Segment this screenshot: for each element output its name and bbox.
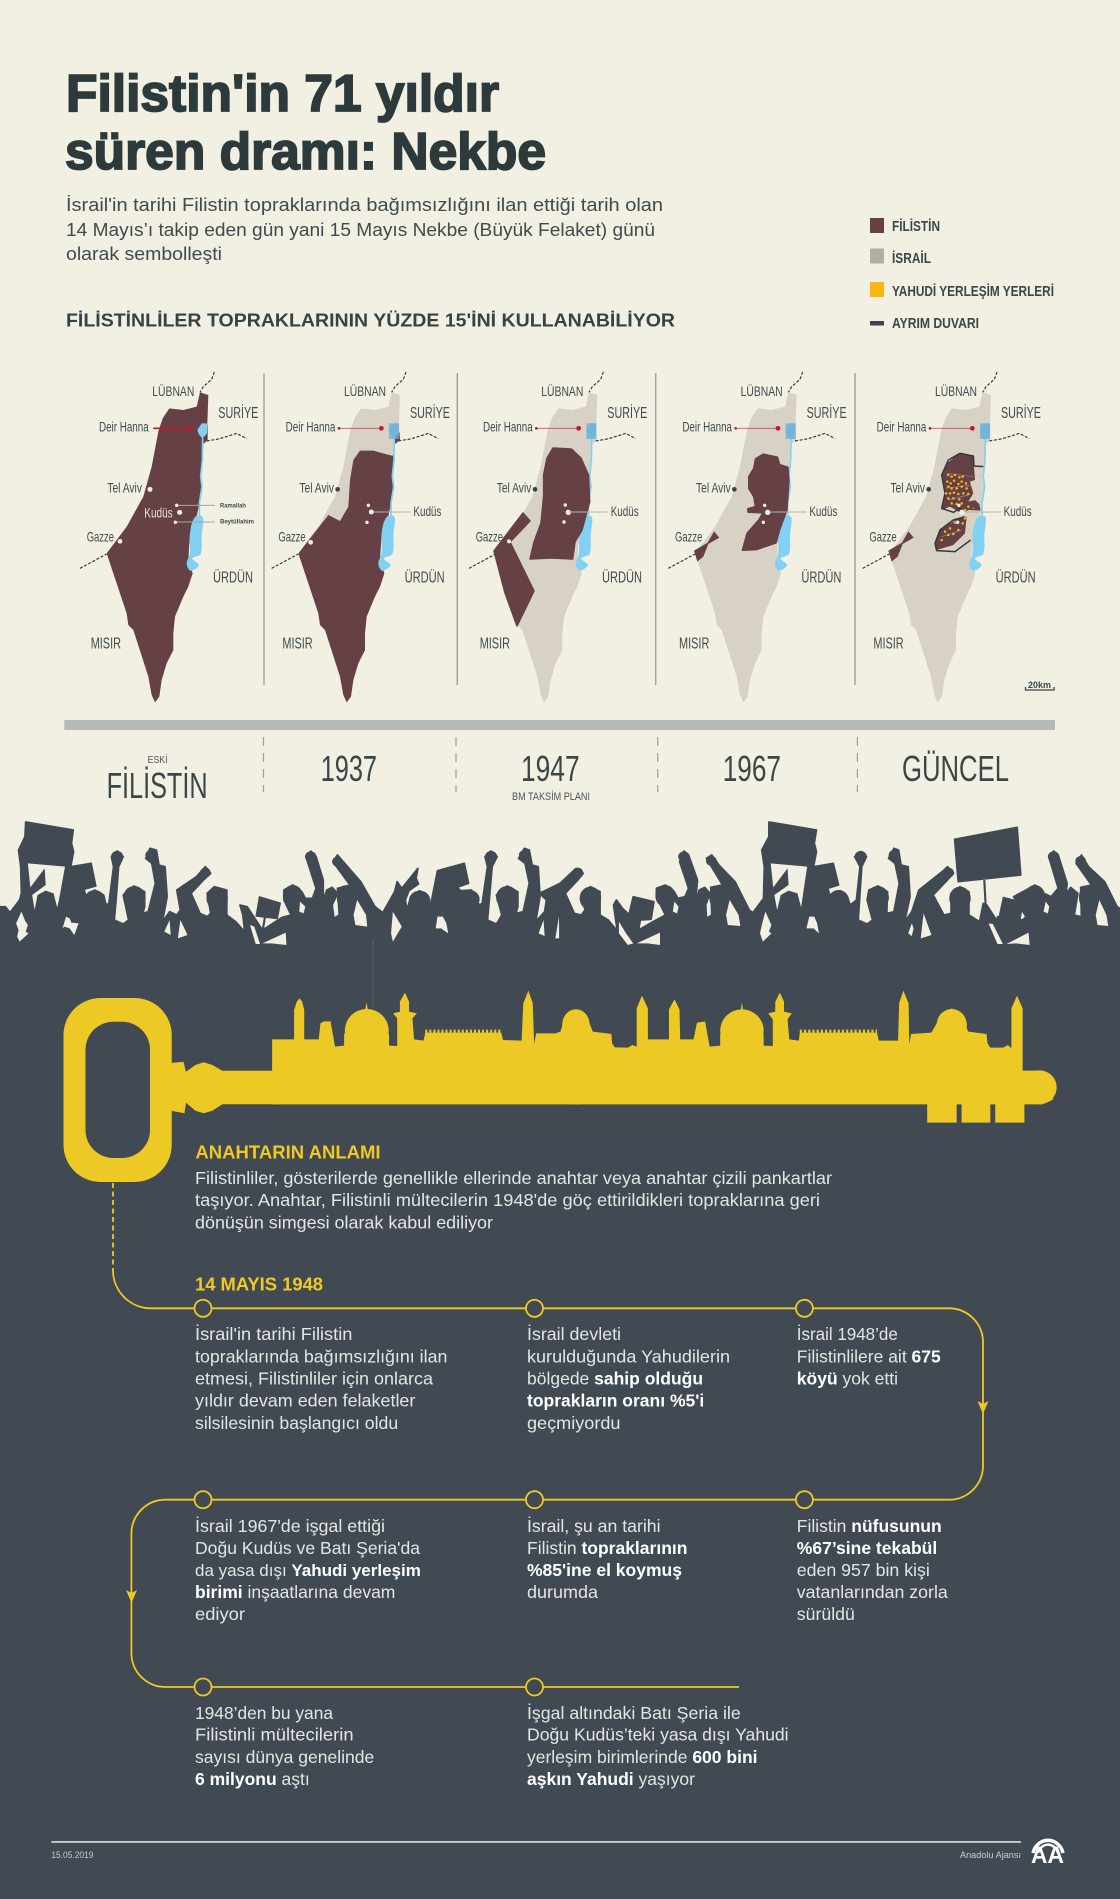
map: 1947 bbox=[469, 372, 647, 702]
map: Eski Filistin: SURİYE bbox=[218, 403, 258, 422]
period label: 1967: 1967 bbox=[723, 748, 781, 789]
map: 1967: MISIR bbox=[679, 635, 709, 652]
map: 1967: Gazze bbox=[675, 529, 702, 545]
footer rule bbox=[51, 1841, 1021, 1843]
event text: 85% of land: Filistin topraklarının bbox=[527, 1538, 687, 1558]
event text: 67% population: sürüldü bbox=[797, 1604, 855, 1624]
map: 1937: Tel Aviv bbox=[299, 479, 334, 495]
legend: Yahudi yerleşim yerleri bbox=[870, 282, 1054, 300]
legend bbox=[870, 218, 1054, 332]
map: 1967: LÜBNAN bbox=[741, 384, 783, 399]
period label: Eski Filistin bbox=[107, 753, 208, 806]
event text: 67% population: Filistin nüfusunun bbox=[797, 1516, 942, 1536]
intro paragraph: İsrail'in tarihi Filistin topraklarında bağımsızlığını ilan ettiği tarih olan bbox=[66, 195, 663, 215]
legend: Filistin: FİLİSTİN bbox=[892, 218, 940, 235]
intro paragraph: olarak sembolleşti bbox=[66, 244, 222, 264]
map: 1967: SURİYE bbox=[807, 403, 847, 422]
map: 1967: ÜRDÜN bbox=[801, 569, 841, 587]
event text: 600 thousand settlers: Doğu Kudüs’teki yasa dışı Yahudi bbox=[527, 1725, 789, 1745]
legend: İsrail: İSRAİL bbox=[892, 250, 931, 267]
event text: 600 thousand settlers: yerleşim birimlerinde 600 bini bbox=[527, 1747, 758, 1767]
map: Eski Filistin: Gazze bbox=[87, 529, 114, 545]
title: süren dramı: Nekbe bbox=[65, 123, 546, 181]
map dividers bbox=[264, 373, 855, 685]
map: 1947: MISIR bbox=[480, 635, 510, 652]
event text: settlements: da yasa dışı Yahudi yerleşim bbox=[195, 1561, 421, 1580]
map: Eski Filistin bbox=[80, 372, 258, 702]
map: 1947: ÜRDÜN bbox=[602, 569, 642, 587]
event text: Israel independence: silsilesinin başlangıcı oldu bbox=[195, 1413, 398, 1433]
map: 1967: Kudüs bbox=[809, 503, 837, 519]
crowd silhouette bbox=[0, 822, 1120, 1000]
event text: 675 villages: Filistinlilere ait 675 bbox=[797, 1346, 941, 1366]
event text: Israel independence: İsrail'in tarihi Filistin bbox=[195, 1324, 352, 1344]
event text: 675 villages bbox=[797, 1324, 941, 1388]
legend: Yahudi yerleşim yerleri: YAHUDİ YERLEŞİM YERLERİ bbox=[892, 283, 1054, 300]
legend: Filistin bbox=[870, 218, 940, 235]
timeline bar bbox=[64, 720, 1055, 730]
period label: 1947: BM TAKSİM PLANI bbox=[512, 790, 590, 803]
event text: land share 5% bbox=[527, 1324, 730, 1433]
map: 1947: Tel Aviv bbox=[497, 479, 531, 495]
map: Güncel: Gazze bbox=[869, 529, 897, 545]
map: 1967: Deir Hanna bbox=[682, 419, 732, 435]
event text: 67% population bbox=[797, 1516, 948, 1624]
map: 1937: Kudüs bbox=[413, 503, 441, 519]
legend: ayrım duvarı bbox=[870, 316, 979, 332]
event text: 675 villages: köyü yok etti bbox=[797, 1368, 898, 1388]
event text: 600 thousand settlers bbox=[527, 1703, 789, 1789]
map: 1967: Tel Aviv bbox=[696, 479, 731, 495]
event text: 85% of land: durumda bbox=[527, 1582, 598, 1602]
dark lower panel bbox=[0, 940, 1120, 1899]
period label: Eski Filistin: ESKİ bbox=[148, 753, 168, 766]
intro paragraph bbox=[66, 195, 663, 264]
map: Eski Filistin: LÜBNAN bbox=[152, 384, 194, 399]
event text: settlements: birimi inşaatlarına devam bbox=[195, 1582, 395, 1602]
section heading: FİLİSTİNLİLER TOPRAKLARININ YÜZDE 15'İNİ KULLANABİLİYOR bbox=[66, 310, 675, 330]
key meaning paragraph: taşıyor. Anahtar, Filistinli mültecilerin 1948'de göç ettirildikleri topraklarına geri bbox=[195, 1190, 820, 1210]
arrow: right side bbox=[978, 1401, 988, 1414]
key meaning paragraph bbox=[195, 1168, 832, 1232]
event text: 85% of land: İsrail, şu an tarihi bbox=[527, 1516, 660, 1536]
map: 1947: SURİYE bbox=[607, 403, 647, 422]
map: Eski Filistin: Tel Aviv bbox=[107, 479, 142, 495]
timeline nodes bbox=[194, 1300, 813, 1696]
heading: Anahtarın anlamı: ANAHTARIN ANLAMI bbox=[195, 1142, 381, 1162]
event text: Israel independence: topraklarında bağımsızlığını ilan bbox=[195, 1346, 447, 1366]
key neck bbox=[171, 1062, 280, 1113]
period label: Güncel: GÜNCEL bbox=[902, 748, 1009, 789]
map: 1967 bbox=[668, 372, 847, 702]
key with Jerusalem skyline bbox=[64, 991, 1057, 1182]
map: 1937 bbox=[265, 372, 450, 707]
1947 Arab state areas bbox=[494, 448, 590, 626]
period dividers bbox=[264, 737, 857, 792]
map: Eski Filistin: Kudüs bbox=[144, 505, 173, 521]
map: Güncel: MISIR bbox=[873, 635, 904, 652]
event text: 600 thousand settlers: aşkın Yahudi yaşıyor bbox=[527, 1769, 695, 1789]
event text: 6 million refugees bbox=[195, 1703, 374, 1789]
event text: land share 5%: bölgede sahip olduğu bbox=[527, 1368, 703, 1388]
event text: land share 5%: toprakların oranı %5'i bbox=[527, 1391, 704, 1411]
map: 1947: Kudüs bbox=[611, 503, 639, 519]
map: Güncel: Tel Aviv bbox=[890, 479, 925, 495]
map: Güncel: SURİYE bbox=[1001, 403, 1041, 422]
map: Eski Filistin: MISIR bbox=[91, 635, 121, 652]
event text: 85% of land bbox=[527, 1516, 687, 1602]
event text: Israel independence bbox=[195, 1324, 447, 1433]
key skyline right and bit bbox=[563, 991, 1057, 1123]
event text: 675 villages: İsrail 1948’de bbox=[797, 1324, 898, 1344]
map: 1947: Gazze bbox=[476, 529, 503, 545]
map: Güncel: Kudüs bbox=[1004, 503, 1032, 519]
event text: 6 million refugees: 6 milyonu aştı bbox=[195, 1769, 310, 1789]
map: Eski Filistin: Ramallah bbox=[220, 502, 246, 509]
map: Eski Filistin: ÜRDÜN bbox=[213, 569, 253, 587]
Anadolu Ajansı logo: AA bbox=[1031, 1842, 1064, 1869]
period label: 1947: 1947 bbox=[521, 748, 580, 789]
event text: 6 million refugees: Filistinli mültecilerin bbox=[195, 1725, 354, 1745]
event text: settlements: İsrail 1967'de işgal ettiği bbox=[195, 1516, 385, 1536]
map: Güncel bbox=[863, 372, 1041, 702]
event text: 67% population: vatanlarından zorla bbox=[797, 1582, 948, 1602]
map: 1937: Deir Hanna bbox=[286, 419, 336, 435]
map: 1937: Gazze bbox=[278, 529, 306, 545]
faint seam line bbox=[372, 940, 374, 1008]
event text: land share 5%: geçmiyordu bbox=[527, 1413, 620, 1433]
map: 1937: ÜRDÜN bbox=[405, 569, 445, 587]
event text: 67% population: eden 957 bin kişi bbox=[797, 1560, 930, 1580]
map: Güncel: Deir Hanna bbox=[877, 419, 927, 435]
footer date: 15.05.2019 bbox=[51, 1850, 93, 1860]
map: Güncel: ÜRDÜN bbox=[996, 569, 1036, 587]
map: 1937: MISIR bbox=[282, 635, 313, 652]
map: 1947: Deir Hanna bbox=[483, 419, 533, 435]
event text: 67% population: %67’sine tekabül bbox=[797, 1538, 937, 1558]
legend: İsrail bbox=[870, 248, 931, 267]
event text: Israel independence: etmesi, Filistinliler için onlarca bbox=[195, 1368, 433, 1388]
1967 West Bank and Gaza bbox=[694, 454, 807, 562]
event text: land share 5%: İsrail devleti bbox=[527, 1324, 621, 1344]
title: Filistin'in 71 yıldır bbox=[66, 65, 499, 123]
event text: 600 thousand settlers: İşgal altındaki Batı Şeria ile bbox=[527, 1703, 741, 1723]
event text: settlements bbox=[195, 1516, 421, 1624]
map: Eski Filistin: Beytüllahim bbox=[220, 519, 254, 526]
intro paragraph: 14 Mayıs’ı takip eden gün yani 15 Mayıs Nekbe (Büyük Felaket) günü bbox=[66, 220, 655, 240]
map: 1937: LÜBNAN bbox=[344, 384, 386, 399]
settlements, enclaves and wall bbox=[888, 453, 1001, 562]
period label: 1947 bbox=[512, 748, 590, 803]
key skyline left bbox=[272, 991, 589, 1104]
map: 1947: LÜBNAN bbox=[541, 384, 583, 399]
event text: land share 5%: kurulduğunda Yahudilerin bbox=[527, 1346, 730, 1366]
event text: Israel independence: yıldır devam eden felaketler bbox=[195, 1391, 416, 1411]
footer agency: Anadolu Ajansı bbox=[960, 1850, 1021, 1860]
event text: settlements: Doğu Kudüs ve Batı Şeria'da bbox=[195, 1538, 420, 1558]
timeline path bbox=[113, 1183, 983, 1687]
heading: 14 Mayıs 1948: 14 MAYIS 1948 bbox=[195, 1275, 323, 1295]
event text: settlements: ediyor bbox=[195, 1604, 245, 1624]
event text: 85% of land: %85'ine el koymuş bbox=[527, 1560, 682, 1580]
key meaning paragraph: Filistinliler, gösterilerde genellikle ellerinde anahtar veya anahtar çizili pankartlar bbox=[195, 1168, 832, 1188]
key meaning paragraph: dönüşün simgesi olarak kabul ediliyor bbox=[195, 1212, 493, 1232]
map: 1937: SURİYE bbox=[410, 403, 450, 422]
map: Güncel: LÜBNAN bbox=[935, 384, 977, 399]
event text: 6 million refugees: sayısı dünya genelinde bbox=[195, 1747, 374, 1767]
title bbox=[65, 65, 546, 181]
map: Eski Filistin: Deir Hanna bbox=[99, 419, 149, 435]
scale bar: 20km bbox=[1028, 680, 1051, 691]
arrow: left side bbox=[126, 1590, 137, 1603]
legend: ayrım duvarı: AYRIM DUVARI bbox=[892, 316, 979, 332]
period label: Eski Filistin: FİLİSTİN bbox=[107, 765, 208, 806]
period label: 1937: 1937 bbox=[321, 748, 377, 789]
event text: 6 million refugees: 1948’den bu yana bbox=[195, 1703, 333, 1723]
key ring bbox=[64, 998, 172, 1182]
